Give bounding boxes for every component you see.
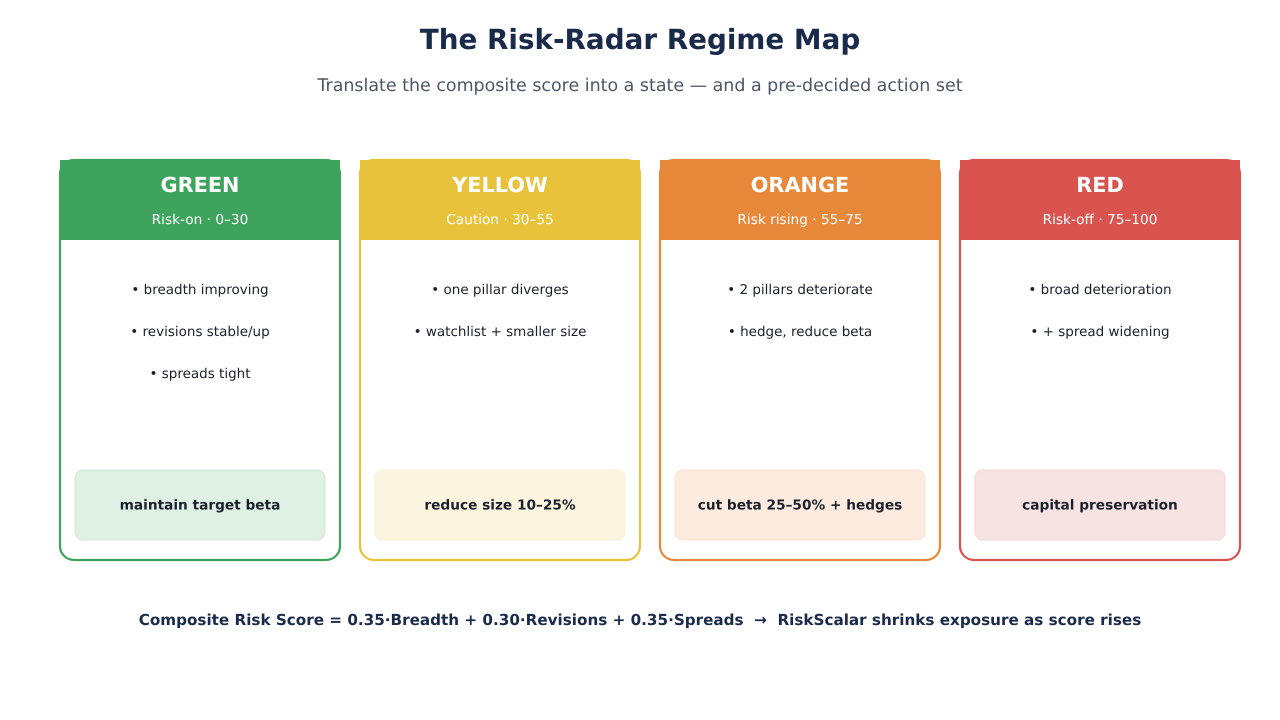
subtitle: Translate the composite score into a state — and a pre-decided action set [316,76,963,96]
panel: green [60,160,340,560]
panel: orange [660,160,940,560]
yellow heading: YELLOW [451,173,548,197]
panel: red [960,160,1240,560]
orange bullets [727,282,873,340]
red action box [975,470,1225,540]
red bullets [1028,282,1172,340]
red header [960,160,1240,240]
green heading: GREEN [161,173,239,197]
green bullets [130,282,270,382]
panel: yellow [360,160,640,560]
green range: Risk-on · 0–30 [152,212,248,228]
yellow bullets: • watchlist + smaller size [414,324,586,340]
green header [60,160,340,240]
yellow range: Caution · 30–55 [446,212,554,228]
red action text: capital preservation [1022,498,1178,514]
yellow bullets: • one pillar diverges [431,282,569,298]
green bullets: • revisions stable/up [130,324,270,340]
yellow header [360,160,640,240]
green action box [75,470,325,540]
green bullets: • spreads tight [149,366,251,382]
orange heading: ORANGE [751,173,849,197]
yellow bullets [414,282,586,340]
title: The Risk-Radar Regime Map [420,23,860,56]
red heading: RED [1076,173,1124,197]
orange bullets: • 2 pillars deteriorate [727,282,873,298]
yellow action text: reduce size 10–25% [424,498,576,514]
yellow action box [375,470,625,540]
red bullets: • broad deterioration [1028,282,1172,298]
orange header [660,160,940,240]
orange action text: cut beta 25–50% + hedges [698,498,902,514]
orange bullets: • hedge, reduce beta [728,324,872,340]
formula footer: Composite Risk Score = 0.35·Breadth + 0.30·Revisions + 0.35·Spreads → RiskScalar shrinks exposure as score rises [139,611,1141,629]
orange action box [675,470,925,540]
green bullets: • breadth improving [131,282,269,298]
green action text: maintain target beta [120,498,280,514]
red range: Risk-off · 75–100 [1043,212,1157,228]
orange range: Risk rising · 55–75 [737,212,863,228]
red bullets: • + spread widening [1030,324,1170,340]
